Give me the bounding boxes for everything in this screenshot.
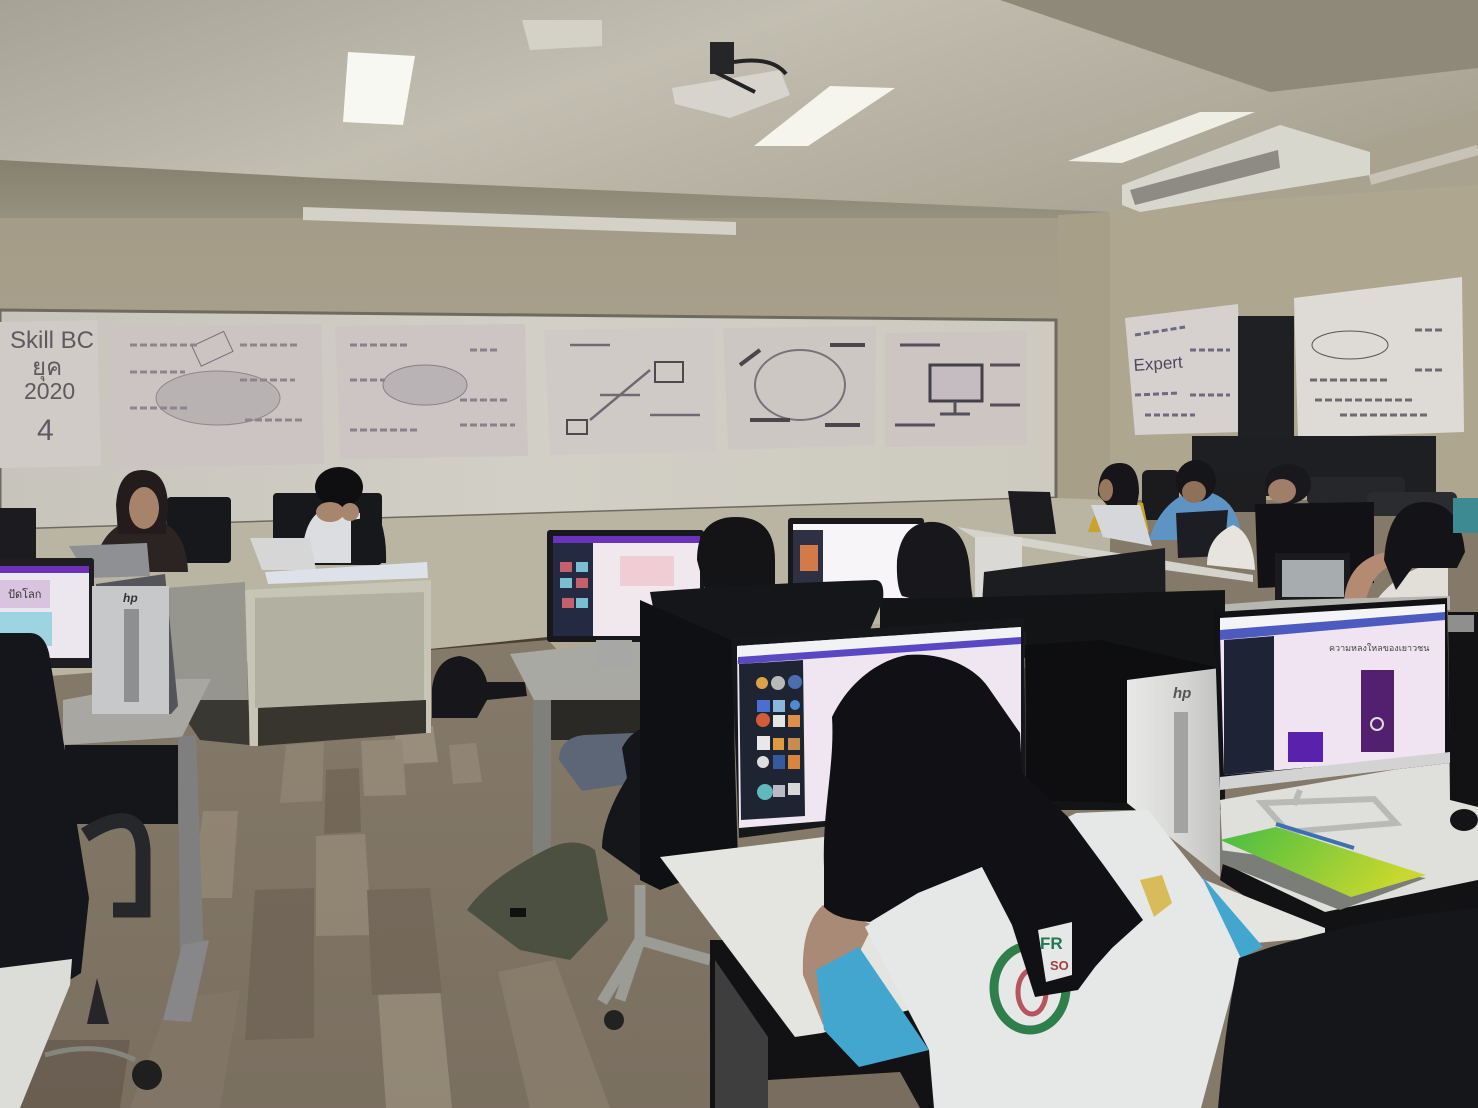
main monitor: [731, 618, 1026, 838]
poster: Skill BC: 4: [37, 414, 54, 447]
left tower pc: [92, 574, 178, 714]
light right: [1068, 112, 1255, 163]
projector: [672, 42, 790, 118]
bottom-left desk: [0, 959, 72, 1108]
middle black chair: [602, 580, 883, 890]
poster: Skill BC: ยุค: [32, 354, 62, 382]
left monitor: [0, 558, 94, 668]
shirt lettering: [1038, 922, 1072, 982]
whiteboard: [0, 310, 1056, 530]
right grey strip: [1448, 615, 1474, 632]
floor bag: [432, 656, 527, 718]
right monitor stand: [1262, 790, 1396, 832]
poster: Skill BC: 2020: [24, 378, 75, 404]
mouse: [1450, 809, 1478, 831]
light left: [343, 52, 415, 125]
air conditioner: [1122, 125, 1478, 212]
student hair: [824, 655, 1143, 997]
poster 8: [1294, 277, 1464, 438]
right desk: [1220, 760, 1478, 912]
wall column: [1058, 212, 1110, 530]
poster 7: Expert: [1133, 353, 1184, 375]
instructor man: [302, 467, 386, 563]
student arm: [803, 905, 873, 1025]
right desk front: [1220, 863, 1478, 945]
poster 2: [108, 324, 324, 468]
middle monitor: [547, 530, 704, 668]
dark band between desks: [880, 590, 1225, 810]
poster 3: [335, 324, 528, 459]
main desk: [660, 810, 1325, 1037]
shirt lettering: FR: [1040, 934, 1063, 953]
main student: [803, 655, 1263, 1108]
chair base: [602, 885, 710, 1030]
baseboard: [430, 640, 548, 652]
pen: [1276, 824, 1354, 848]
left desk: [63, 679, 211, 1022]
teacher chair right: [273, 493, 382, 565]
under desk panel: [710, 940, 950, 1108]
student head middle: [697, 517, 775, 590]
white bag: [1207, 525, 1255, 570]
poster 4: [544, 327, 716, 455]
poster: Skill BC: [0, 320, 101, 468]
jeans: [559, 733, 634, 791]
right black side: [1448, 612, 1478, 807]
backpack: [467, 842, 608, 960]
teacher desk left: [165, 582, 249, 745]
ceiling: [0, 0, 1478, 250]
ceiling beam: [0, 160, 1110, 262]
back row desk: [957, 527, 1253, 582]
back row students: [1088, 460, 1311, 540]
teacher desk right: [245, 562, 431, 746]
left tower pc: hp: [123, 591, 138, 605]
lower wall: [0, 498, 1110, 680]
right wall: [1108, 185, 1478, 500]
poster: Skill BC: Skill BC: [10, 327, 94, 354]
left monitor: ปัดโลก: [8, 587, 41, 601]
student long hair: [888, 522, 980, 630]
small laptop: [1275, 553, 1350, 600]
instructor laptops: [69, 538, 316, 578]
dark window: [1238, 316, 1294, 436]
floor: [0, 640, 960, 1108]
poster 6: [885, 331, 1026, 447]
black chair behind monitor: [980, 548, 1190, 700]
green book: [1220, 827, 1426, 910]
wall projector mount: [522, 20, 602, 50]
main tower pc: [1025, 640, 1220, 877]
back row chairs: [1142, 470, 1457, 520]
student back right: [1344, 498, 1478, 600]
right monitor: [1214, 598, 1450, 790]
instructor woman: [94, 470, 188, 572]
light center: [754, 86, 895, 146]
front wall: [0, 218, 1110, 668]
floor planks: [0, 726, 610, 1108]
second middle monitor: [788, 518, 924, 602]
dark lower window: [1192, 436, 1436, 496]
back row laptops: [1008, 491, 1374, 588]
right monitor: ความหลงใหลของเยาวชน: [1329, 643, 1429, 653]
poster 5: [723, 326, 876, 450]
middle desk: [510, 640, 641, 857]
teacher chair left: [167, 497, 231, 563]
left chair: [0, 633, 162, 1090]
right row desk: [1190, 596, 1450, 620]
foreground chair: [1218, 908, 1478, 1108]
main tower pc: hp: [1173, 685, 1191, 702]
black monitor far left: [0, 508, 36, 558]
poster 7: [1125, 304, 1242, 435]
shirt lettering: SO: [1050, 958, 1069, 973]
student shirt: [816, 810, 1263, 1108]
beam housing: [303, 207, 736, 235]
back row tower: [975, 537, 1022, 597]
